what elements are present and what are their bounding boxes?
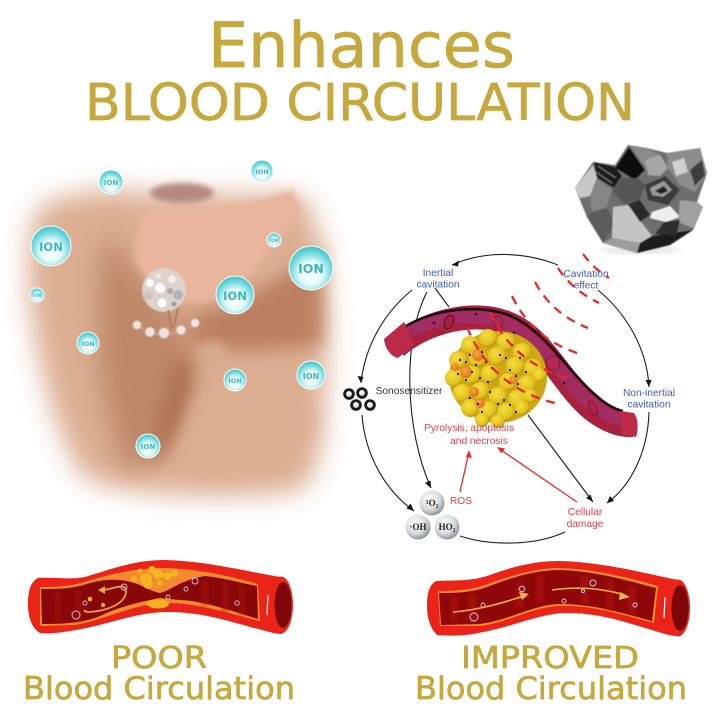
icon: ion bubble (224, 369, 246, 391)
arrow: ROS to necrosis (460, 450, 472, 492)
icon: reactive oxygen molecules: 1 (426, 500, 429, 506)
photo: skin and earring (28, 183, 327, 496)
icon: ion bubble (31, 226, 71, 266)
panel: improved circulation (415, 561, 690, 707)
flow arrow (552, 588, 630, 600)
icon: ion bubble: ION (223, 289, 247, 303)
label: non-inertial cavitation: cavitation (627, 400, 671, 410)
earring pearls (132, 318, 200, 338)
icon: ion bubble: ION (255, 168, 269, 176)
panel: sonodynamic cavitation diagram (345, 254, 675, 543)
panel: ear photo with ions (28, 160, 333, 496)
panel: poor circulation (23, 560, 295, 707)
icon: ion bubble: ION (303, 372, 319, 381)
icon: ion bubble: ION (104, 179, 118, 187)
label: pyrolysis, apoptosis and necrosis: Pyrolysis, apoptosis (424, 423, 514, 434)
icon: ion bubble: ION (270, 238, 278, 243)
arrow: cellular damage to necrosis (497, 447, 577, 502)
blood vessel (384, 309, 638, 437)
icon: ion bubble: ION (298, 261, 324, 276)
label: POOR: POOR (111, 641, 207, 676)
icon: ion bubble (216, 276, 254, 314)
icon: ion bubble: ION (81, 340, 95, 348)
icon: ion bubble (30, 288, 44, 302)
label: Blood Circulation: Blood Circulation (23, 671, 295, 707)
label: cavitation effect: effect (574, 280, 599, 292)
label: cellular damage: damage (567, 519, 604, 530)
icon: ion bubble (297, 361, 325, 389)
recirculating flow arrow (86, 586, 126, 612)
icon: reactive oxygen molecules (406, 490, 460, 540)
tumor cell cluster (445, 329, 547, 428)
label: pyrolysis, apoptosis and necrosis: and necrosis (450, 436, 508, 447)
label: inertial cavitation: Inertial (423, 268, 453, 279)
plaque (131, 566, 178, 608)
heading: Enhances: Enhances (208, 9, 515, 82)
icon: ion bubble: ION (33, 293, 41, 298)
label: Blood Circulation: Blood Circulation (415, 671, 687, 707)
earring stud (142, 268, 186, 328)
label: inertial cavitation: cavitation (416, 280, 460, 290)
label: ROS: ROS (450, 496, 472, 507)
red dashed ultrasound waves (467, 254, 609, 403)
icon: reactive oxygen molecules: ·OH (409, 522, 427, 532)
icon: ion bubble (99, 170, 123, 194)
cycle arrows (358, 254, 652, 543)
icon: reactive oxygen molecules: O₂ (429, 498, 439, 508)
label: cavitation effect: Cavitation (563, 269, 609, 280)
icon: reactive oxygen molecules: HO₂ (439, 522, 456, 532)
icon: ion bubble (267, 233, 281, 247)
flow arrow (453, 592, 529, 612)
icon: ion bubble (251, 160, 273, 182)
label: cellular damage: Cellular (568, 507, 602, 518)
icon: ion bubble (289, 246, 333, 290)
icon: ion bubble: ION (228, 377, 242, 385)
illustration: narrowed artery (28, 560, 293, 634)
icon: ion bubble (136, 434, 160, 458)
label: non-inertial cavitation: Non-inertial (623, 388, 675, 399)
label: sonosensitizer: Sonosensitizer (376, 386, 443, 397)
icon: ion bubble: ION (39, 240, 63, 254)
label: IMPROVED: IMPROVED (461, 641, 639, 676)
title (85, 9, 635, 133)
illustration: healthy artery (427, 561, 690, 636)
icon: ion bubble (77, 332, 99, 354)
icon: mineral rock (575, 145, 707, 253)
icon: sonosensitizer particles (345, 389, 374, 409)
heading: BLOOD CIRCULATION: BLOOD CIRCULATION (85, 74, 635, 133)
icon: ion bubble: ION (141, 443, 155, 451)
